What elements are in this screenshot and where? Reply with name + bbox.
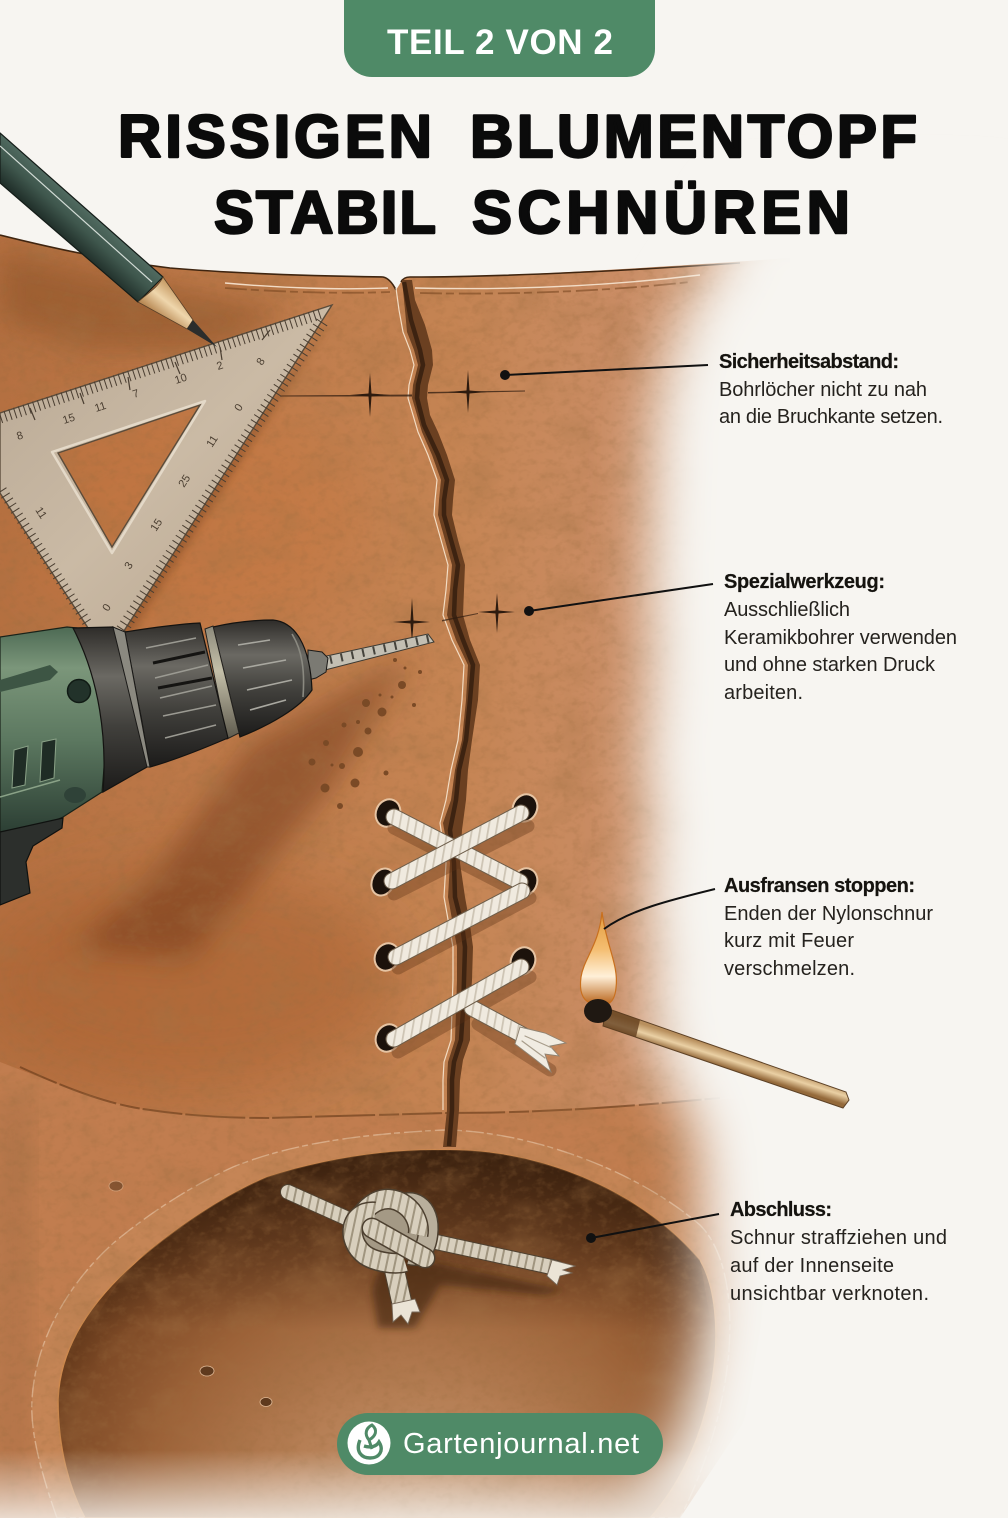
ruler numbers <box>15 356 268 614</box>
square body <box>0 305 332 634</box>
second pair of drill marks <box>393 593 515 642</box>
callout text: arbeiten. <box>724 682 803 704</box>
header text: TEIL 2 VON 2 <box>387 23 613 62</box>
ruler numbers: 7 <box>131 388 141 401</box>
chuck rear <box>125 623 228 767</box>
leader line <box>524 584 713 616</box>
footer text: Gartenjournal.net <box>403 1428 639 1460</box>
handle <box>0 818 63 905</box>
callout text <box>724 875 933 980</box>
callout text: kurz mit Feuer <box>724 930 854 952</box>
knot shadow <box>372 1250 565 1328</box>
callout text: Abschluss: <box>730 1199 832 1221</box>
title <box>118 103 917 246</box>
lower pot band <box>0 1062 720 1482</box>
drilled holes <box>367 790 542 1056</box>
ruler numbers: 10 <box>173 372 189 387</box>
green housing <box>0 627 107 832</box>
leader line <box>586 1214 719 1243</box>
silver ring <box>205 626 239 739</box>
ruler numbers: 11 <box>204 434 221 450</box>
ruler numbers: 15 <box>61 412 77 427</box>
white fade on the right side of the pot <box>630 200 1008 1518</box>
knot core <box>352 1200 424 1256</box>
callout text: Schnur straffziehen und <box>730 1227 947 1249</box>
callout text: Enden der Nylonschnur <box>724 903 933 925</box>
crack highlight <box>396 288 464 1110</box>
charred stick section <box>603 1008 640 1037</box>
cutout bevel <box>52 401 205 553</box>
square shadow <box>96 312 336 640</box>
leader line <box>604 889 715 929</box>
collar <box>73 627 147 792</box>
clay texture <box>36 277 680 1452</box>
ruler numbers: 11 <box>93 400 108 415</box>
leader line <box>500 365 708 380</box>
flame <box>580 912 616 1004</box>
rim of the opening <box>32 1130 730 1518</box>
rope shadows <box>394 826 550 1070</box>
wood tip <box>138 277 193 329</box>
lead tip <box>187 320 217 347</box>
fade at the bottom edge <box>0 1454 702 1518</box>
housing details <box>0 665 90 803</box>
lacing through the holes <box>367 790 566 1072</box>
callout text: Spezialwerkzeug: <box>724 571 885 593</box>
rope stitches on top <box>392 813 522 1039</box>
rim edge <box>0 235 740 290</box>
ruler numbers: 8 <box>254 356 268 368</box>
title: RISSIGEN <box>118 103 432 170</box>
crack inner shadow <box>404 282 473 1146</box>
title: SCHNÜREN <box>472 179 850 246</box>
drilling dust <box>308 658 422 809</box>
ruler numbers: 11 <box>32 505 49 521</box>
knot on the inner side <box>288 1192 575 1328</box>
callout text: Sicherheitsabstand: <box>719 351 899 373</box>
callout text: auf der Innenseite <box>730 1255 894 1277</box>
ruler numbers: 0 <box>232 402 246 414</box>
drill <box>0 620 434 905</box>
shading under the rim <box>0 250 290 350</box>
ruler numbers: 0 <box>100 602 114 614</box>
ruler numbers: 8 <box>15 430 25 443</box>
upper crossing rope <box>394 817 520 882</box>
title: BLUMENTOPF <box>470 103 917 170</box>
logo icon <box>348 1422 390 1464</box>
callout text: Bohrlöcher nicht zu nah <box>719 379 927 401</box>
pencil body <box>0 133 163 302</box>
dark shade at the top of the opening <box>108 1150 702 1316</box>
spindle <box>308 650 328 680</box>
callout: Sicherheitsabstand <box>500 351 943 428</box>
callout text <box>719 351 943 428</box>
match stick <box>603 1008 849 1108</box>
ruler numbers: 15 <box>148 517 165 534</box>
ruler numbers: 3 <box>122 560 136 572</box>
callout text: Keramikbohrer verwenden <box>724 627 957 649</box>
callout: Ausfransen stoppen <box>604 875 933 980</box>
pencil <box>0 133 217 347</box>
callout text: und ohne starken Druck <box>724 654 936 676</box>
title: STABIL <box>214 179 436 246</box>
callout: Spezialwerkzeug <box>524 571 957 704</box>
callout: Abschluss <box>586 1199 947 1305</box>
ruler numbers: 25 <box>176 473 193 490</box>
match head <box>584 999 612 1023</box>
callout text: Ausfransen stoppen: <box>724 875 915 897</box>
collar strip <box>113 627 150 767</box>
solid paper area at the far right <box>680 200 1008 1518</box>
callout text: Ausschließlich <box>724 599 850 621</box>
header tab <box>344 0 655 77</box>
chuck ribs <box>238 634 304 710</box>
footer badge <box>337 1413 663 1475</box>
lower rope, frayed end <box>472 1008 566 1072</box>
callout text <box>730 1199 947 1305</box>
terracotta pot <box>0 234 760 1518</box>
drill bit <box>322 634 434 670</box>
chuck front <box>213 620 312 737</box>
callout text: verschmelzen. <box>724 958 855 980</box>
ruler ticks <box>0 314 322 630</box>
callout text <box>724 571 957 704</box>
inside of the pot <box>58 1150 716 1518</box>
rope ends <box>288 1192 556 1308</box>
crack <box>402 280 480 1147</box>
chip marks in the pot <box>109 1181 272 1406</box>
chuck rear ribs <box>146 638 216 738</box>
first pair of drill marks <box>280 370 525 417</box>
callout text: unsichtbar verknoten. <box>730 1283 929 1305</box>
pencil highlight <box>0 146 152 282</box>
frayed tips <box>392 1260 575 1324</box>
match <box>580 912 849 1108</box>
ruler numbers: 2 <box>215 360 225 373</box>
set square <box>0 305 336 640</box>
knot loops <box>353 1199 428 1263</box>
callout text: an die Bruchkante setzen. <box>719 406 943 428</box>
